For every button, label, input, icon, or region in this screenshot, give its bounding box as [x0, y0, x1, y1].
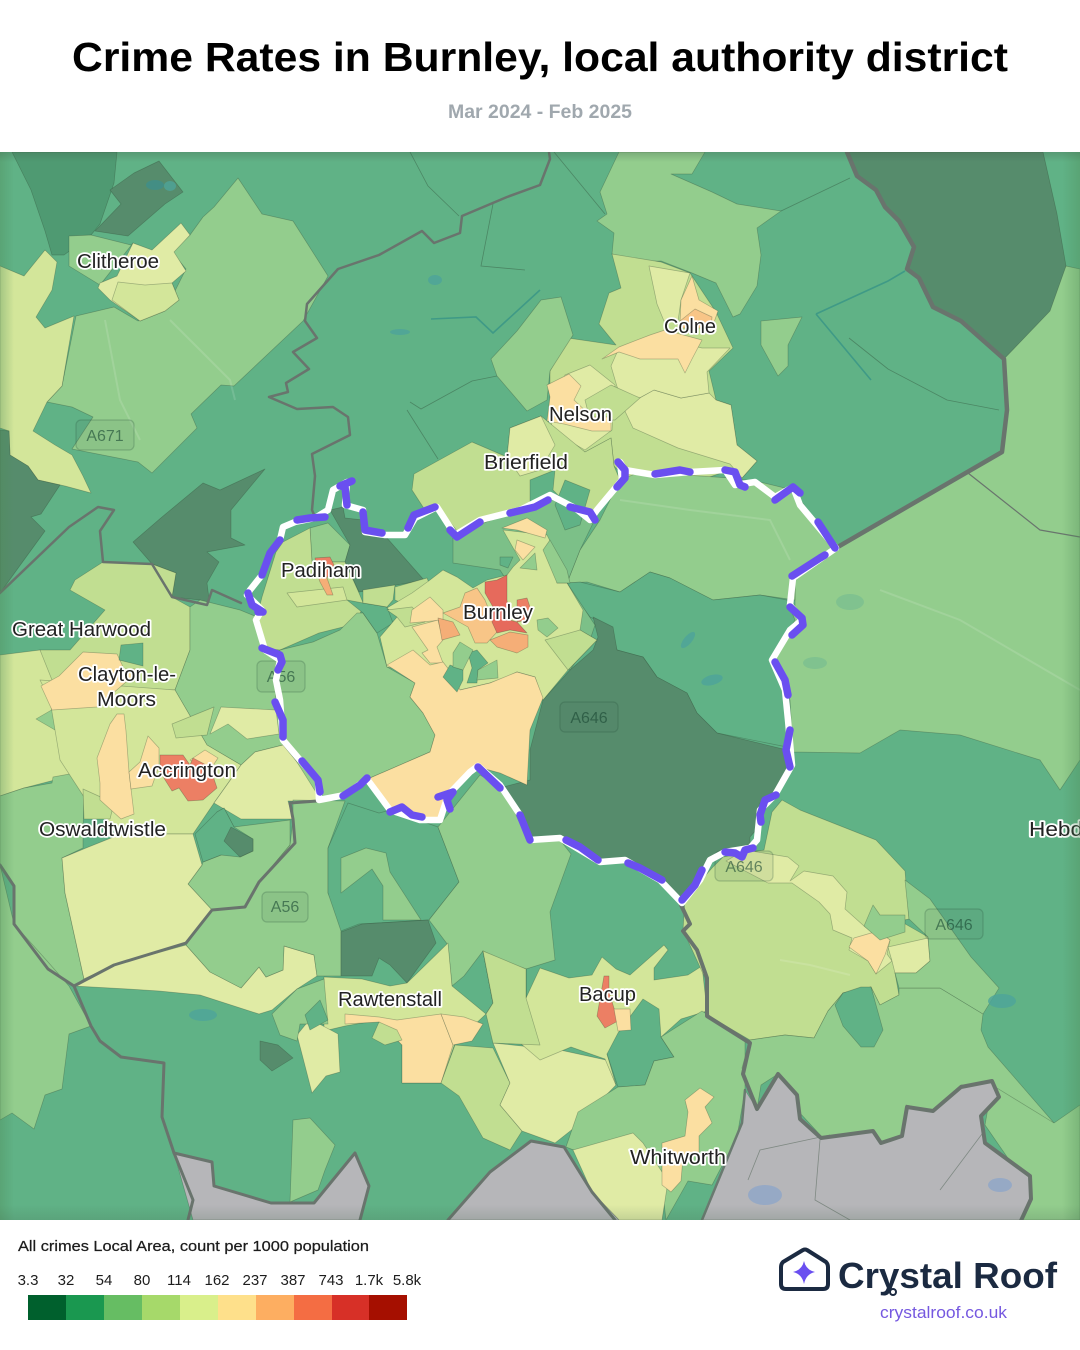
wordmark y-tail key: [890, 1289, 896, 1295]
subtitle: date range: Mar 2024 - Feb 2025: [448, 102, 632, 123]
road label A56 north: [257, 661, 305, 692]
district and county border lines: [0, 152, 1080, 1225]
label Rawtenstall: Rawtenstall: [338, 989, 442, 1011]
legend scale values: 114: [167, 1272, 191, 1289]
label Nelson: Nelson: [549, 404, 612, 426]
road label A646 centre: [560, 702, 618, 732]
legend scale values: 54: [96, 1272, 112, 1289]
legend scale values: 387: [280, 1272, 306, 1289]
label Hebden (cut off): Hebd: [1029, 819, 1080, 841]
legend scale values: 1.7k: [355, 1272, 384, 1289]
place labels: [12, 251, 1080, 1169]
logo wordmark: Crystal Roof: [838, 1255, 1058, 1296]
legend scale values: 3.3: [18, 1272, 38, 1289]
choropleth map: [0, 152, 1080, 1225]
road label A671: A671: [86, 428, 124, 445]
legend scale values: 32: [58, 1272, 74, 1289]
label Accrington: Accrington: [138, 760, 236, 782]
road labels: [76, 420, 983, 939]
icon: house with star: [781, 1250, 828, 1289]
road label A646 far east: [925, 909, 983, 939]
label Bacup: Bacup: [579, 984, 636, 1006]
legend scale values: 743: [318, 1272, 344, 1289]
road label A56 south: [262, 892, 308, 922]
legend: [18, 1238, 422, 1320]
label Padiham: Padiham: [281, 560, 361, 582]
road label A56 south: A56: [271, 899, 299, 916]
legend scale values: [18, 1272, 422, 1289]
road label A646 centre: A646: [570, 710, 608, 727]
road label A671: [76, 420, 134, 450]
water bodies: [146, 180, 1016, 1205]
legend scale values: 162: [204, 1272, 230, 1289]
road label A646 far east: A646: [935, 917, 973, 934]
label Whitworth: Whitworth: [630, 1147, 726, 1169]
label Clayton-le-Moors: Moors: [97, 689, 156, 711]
legend title: All crimes Local Area, count per 1000 population: [18, 1238, 369, 1255]
label Oswaldtwistle: Oswaldtwistle: [39, 819, 166, 841]
website: crystalroof.co.uk: [880, 1303, 1008, 1322]
legend scale values: 237: [242, 1272, 268, 1289]
Burnley district boundary: [247, 462, 836, 903]
label Brierfield: Brierfield: [484, 452, 568, 474]
label Clitheroe: Clitheroe: [77, 251, 159, 273]
road label A646 east: [715, 851, 773, 881]
legend scale values: 80: [134, 1272, 150, 1289]
label Clayton-le-Moors: [78, 664, 176, 711]
rivers and minor area lines: [105, 152, 1080, 1220]
legend scale values: 5.8k: [393, 1272, 422, 1289]
purple dashes on boundary: [248, 462, 835, 900]
areas: crime-rate polygons: [0, 152, 1080, 1220]
legend colour bar: [28, 1295, 407, 1320]
road label A646 east: A646: [725, 859, 763, 876]
label Great Harwood: Great Harwood: [12, 619, 151, 641]
logo: Crystal Roof: [781, 1250, 1058, 1322]
label Colne: Colne: [664, 316, 716, 338]
title: Crime Rates in Burnley, local authority district: [72, 34, 1008, 80]
label Clayton-le-Moors: Clayton-le-: [78, 664, 176, 686]
label Burnley: Burnley: [463, 602, 533, 624]
road label A56 north: A56: [267, 669, 295, 686]
